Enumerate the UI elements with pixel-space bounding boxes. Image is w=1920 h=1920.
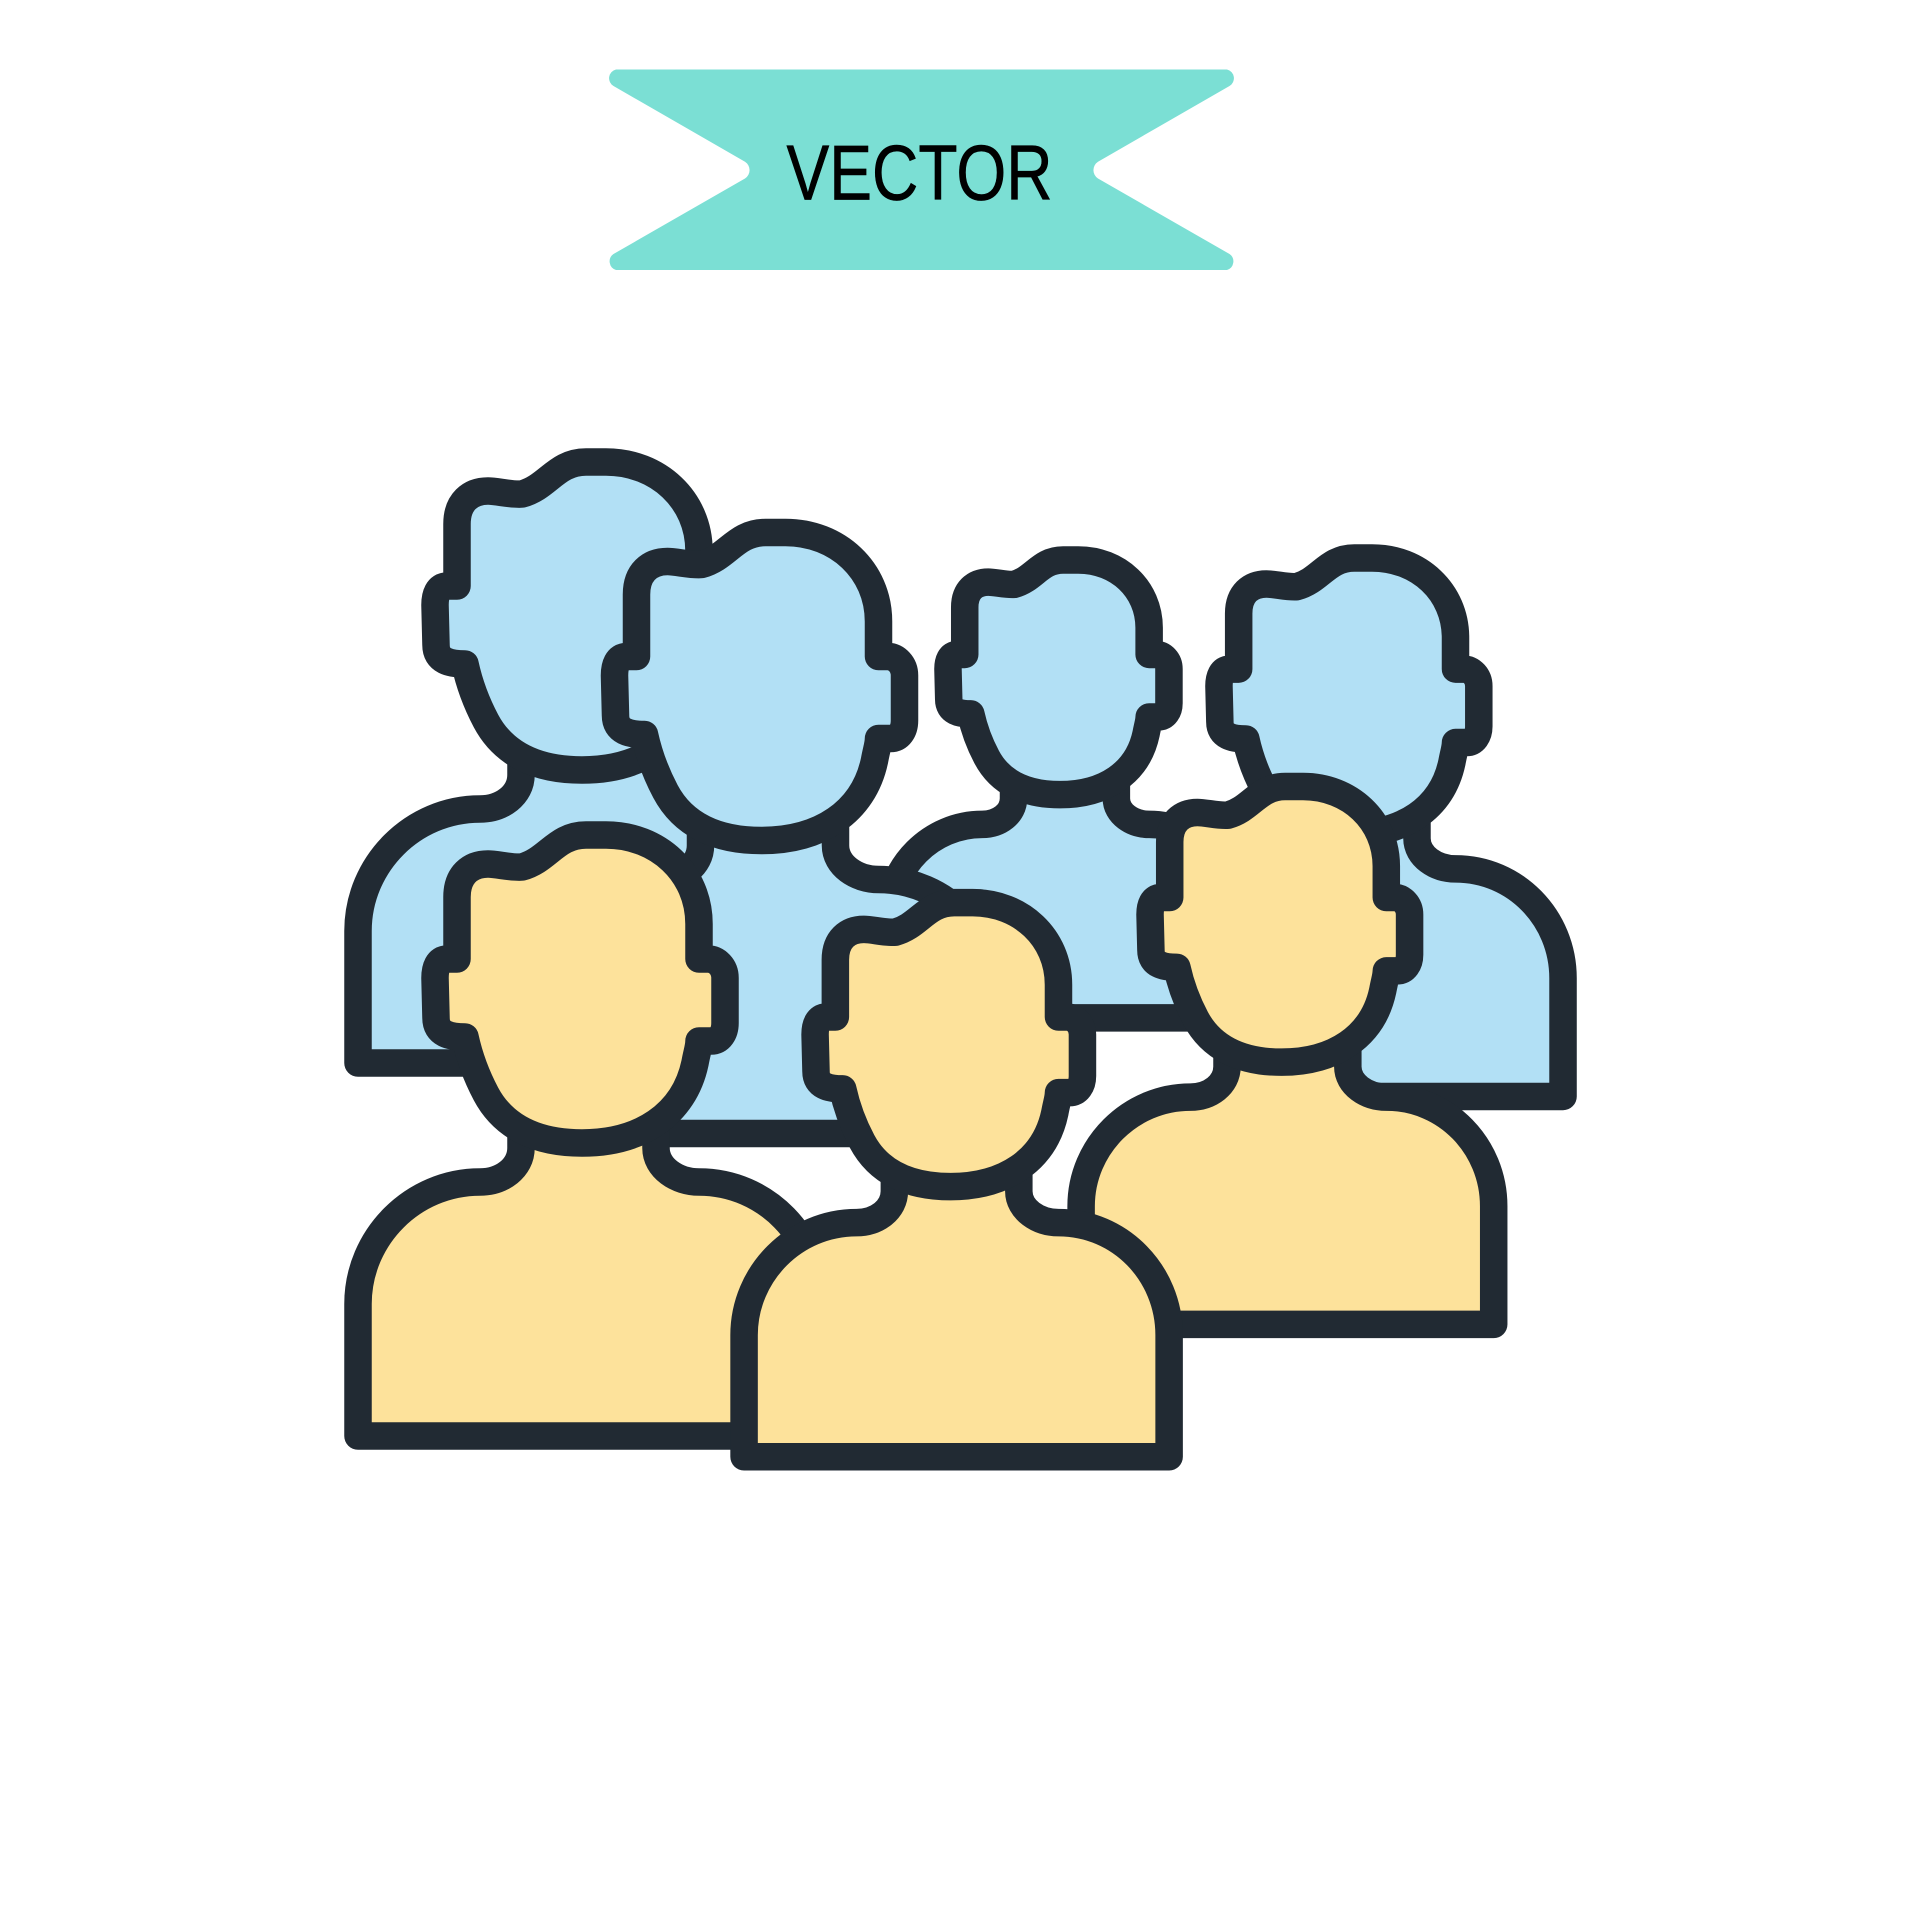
person: back row third, blue bbox=[889, 560, 1241, 1018]
person: back row far right, blue bbox=[1150, 558, 1563, 1096]
person: back row second, blue bbox=[538, 532, 998, 1134]
banner ribbon bbox=[609, 70, 1234, 270]
icon: group of people bbox=[358, 462, 1563, 1457]
person: front row center, yellow bbox=[744, 903, 1169, 1457]
person: front row right, yellow bbox=[1081, 787, 1494, 1324]
banner label: VECTOR bbox=[786, 128, 1052, 216]
infographic canvas bbox=[344, 70, 1577, 1470]
person: front row left, yellow bbox=[358, 835, 819, 1436]
person: back row far left, blue bbox=[358, 462, 819, 1063]
